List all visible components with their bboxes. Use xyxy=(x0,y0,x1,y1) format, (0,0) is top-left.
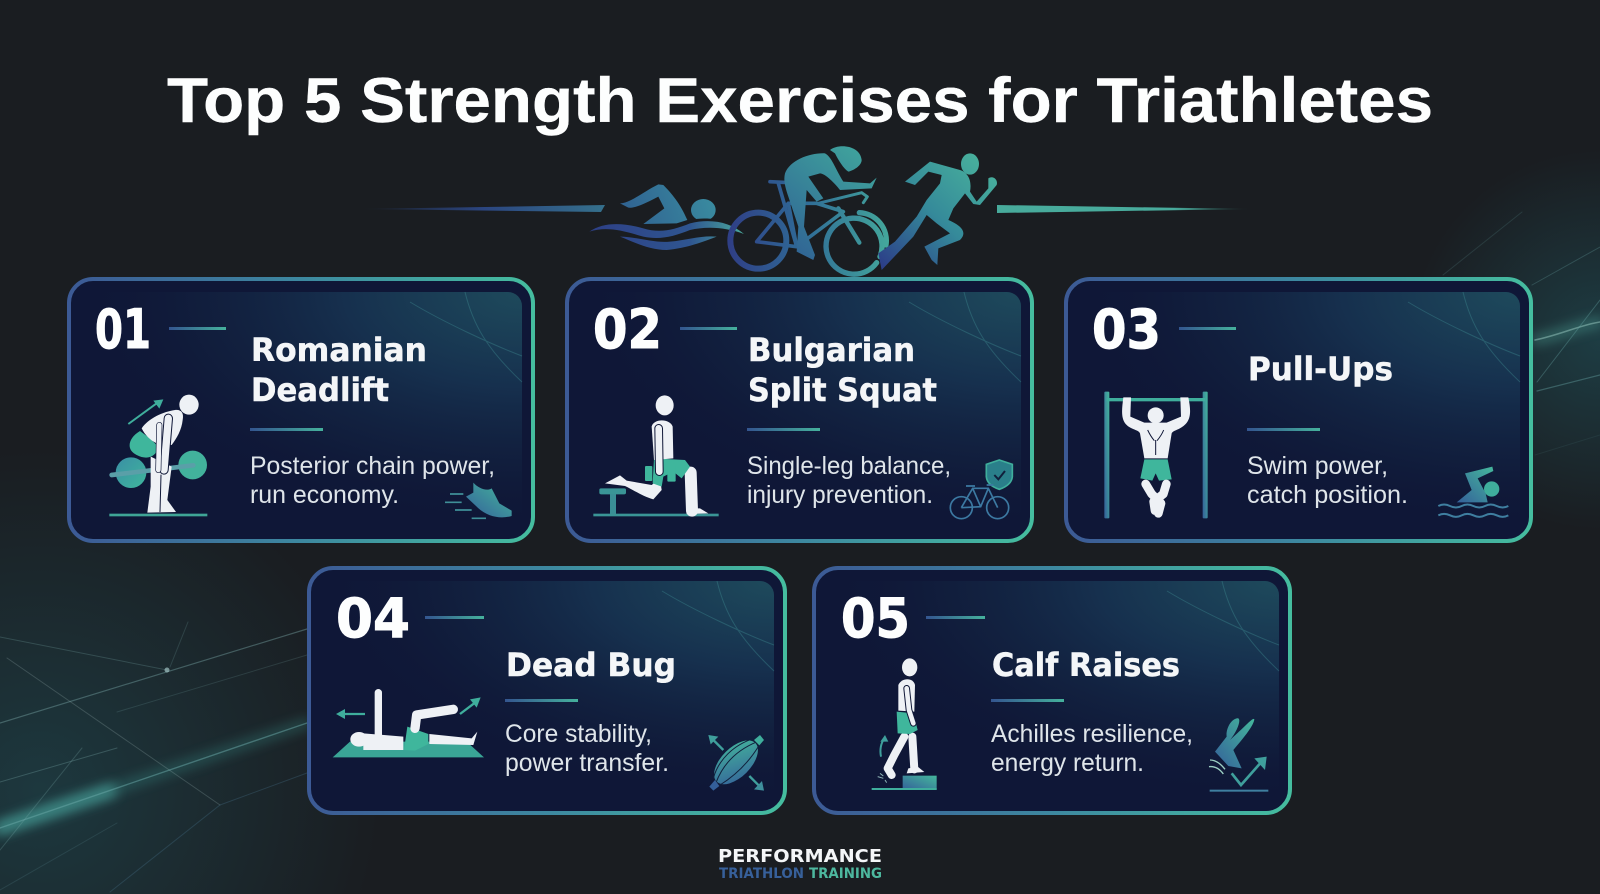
icon: achilles spring and check xyxy=(1209,718,1268,792)
runner xyxy=(878,153,997,270)
right accent line xyxy=(997,205,1250,213)
heading xyxy=(251,331,427,409)
swimmer xyxy=(589,184,744,250)
cyclist xyxy=(730,146,886,274)
icon: swimmer xyxy=(1438,467,1508,517)
description xyxy=(250,452,495,509)
description: Single-leg balance, xyxy=(747,452,951,480)
panel: card 01 Romanian Deadlift xyxy=(69,279,533,541)
icon: dead bug figure xyxy=(333,693,484,757)
number 01: 01 xyxy=(95,298,151,361)
description xyxy=(1247,452,1408,509)
description: Swim power, xyxy=(1247,452,1388,480)
hero: swim, bike, run silhouettes xyxy=(362,146,1250,274)
title: Top 5 Strength Exercises for Triathletes xyxy=(167,66,1433,136)
number 05: 05 xyxy=(841,587,910,650)
heading: Split Squat xyxy=(748,371,937,409)
left accent line xyxy=(362,205,605,212)
footer logo: TRIATHLON xyxy=(719,866,804,882)
footer logo xyxy=(718,846,882,882)
description: power transfer. xyxy=(505,749,669,777)
number 04: 04 xyxy=(336,587,410,650)
description xyxy=(505,720,669,777)
heading: Pull-Ups xyxy=(1248,350,1393,388)
icon: pull-up figure xyxy=(1104,392,1208,518)
panel: card 04 Dead Bug xyxy=(309,568,785,813)
panel: card 05 Calf Raises xyxy=(814,568,1290,813)
icon: muscle with arrows xyxy=(706,733,766,792)
icon: deadlift figure xyxy=(109,395,207,516)
description: Core stability, xyxy=(505,720,652,748)
icon: running shoe xyxy=(445,483,512,518)
footer logo: TRAINING xyxy=(809,866,882,882)
description: Posterior chain power, xyxy=(250,452,495,480)
description: catch position. xyxy=(1247,481,1408,509)
number 02: 02 xyxy=(593,298,662,361)
icon: calf raise figure xyxy=(872,658,937,790)
description: energy return. xyxy=(991,749,1144,777)
heading: Deadlift xyxy=(251,371,389,409)
panel: card 03 Pull-Ups xyxy=(1066,279,1531,541)
description: Achilles resilience, xyxy=(991,720,1193,748)
number 03: 03 xyxy=(1092,298,1161,361)
description xyxy=(991,720,1193,777)
panel: card 02 Bulgarian Split Squat xyxy=(567,279,1032,541)
heading: Dead Bug xyxy=(506,646,676,684)
description xyxy=(747,452,951,509)
heading: Romanian xyxy=(251,331,427,369)
icon: shield and bicycle xyxy=(950,460,1012,519)
description: injury prevention. xyxy=(747,481,933,509)
footer logo: PERFORMANCE xyxy=(718,846,882,867)
heading xyxy=(748,331,937,409)
heading: Bulgarian xyxy=(748,331,915,369)
description: run economy. xyxy=(250,481,399,509)
icon: split squat figure xyxy=(593,395,719,516)
heading: Calf Raises xyxy=(992,646,1180,684)
